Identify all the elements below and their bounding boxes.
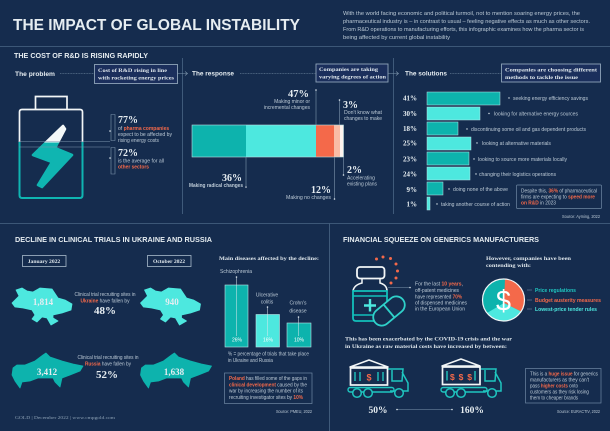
chart: solutions bars: 30%: [403, 110, 417, 118]
chart: solutions bars: [403, 92, 588, 210]
callout: huge issue: manufacturers as they can't: [530, 378, 590, 384]
legend: pressures: Price regulations: [535, 288, 576, 294]
icon: battery with lightning bolt: [20, 96, 82, 198]
source: Euractiv: Source: EURACTIV, 2022: [557, 409, 601, 414]
chart: response stacked bar: 36%: [222, 173, 242, 184]
icon: medicine bottle and pill: [353, 256, 408, 329]
stat: 77% and 72%: other sectors: [118, 164, 149, 170]
stat: Ukraine 48%: Ukraine have fallen by: [80, 298, 130, 304]
chart: pressure pie with dollar sign: $: [496, 286, 511, 318]
callout: Poland: clinical development caused by the: [229, 382, 307, 388]
chart: main diseases: % = percentage of trials that take place: [228, 352, 309, 358]
text: contending with: [486, 256, 572, 269]
callout: huge issue: pass higher costs onto: [530, 384, 578, 390]
map: Russia January: [12, 353, 83, 388]
panel: cost of R&D: [14, 53, 602, 219]
flow header row: Companies are taking: [319, 67, 378, 73]
stat: Ukraine 48%: 48%: [94, 305, 116, 317]
chart: main diseases: 10%: [294, 338, 305, 344]
text: off-patent medicines: [388, 282, 467, 312]
chart: response stacked bar: incremental changes: [264, 105, 310, 111]
chart: main diseases: Schizophrenia: [220, 269, 252, 275]
map: Ukraine January: 1,814: [33, 297, 54, 307]
stat: 77% and 72%: [19, 114, 172, 174]
stat: Russia 52%: [78, 355, 139, 381]
text: off-patent medicines: off-patent medicines: [415, 288, 459, 294]
panel: clinical trials: [12, 237, 319, 420]
map: Russia October: 1,638: [164, 367, 185, 377]
footer: GOLD | December 2022 | www.cmpgold.com: [15, 415, 115, 420]
chart: main diseases: in Ukraine and Russia: [228, 358, 273, 364]
chart: solutions bars: 25%: [403, 140, 417, 148]
heading: cost of R&D: THE COST OF R&D IS RISING RAPIDLY: [14, 53, 148, 60]
title: THE IMPACT OF GLOBAL INSTABILITY: [13, 17, 300, 34]
legend: pressures: Budget austerity measures: [535, 298, 601, 304]
text: contending with: contending with:: [486, 263, 531, 269]
text: off-patent medicines: of dispensed medicines: [415, 300, 467, 306]
date labels: January 2022: [28, 259, 60, 265]
chart: main diseases: 26%: [232, 338, 243, 344]
intro text: With the world facing economic and political turmoil, not to mention soaring energy prices, the: [343, 11, 580, 17]
map: Ukraine October: 940: [165, 297, 179, 307]
flow header row: Cost of R&D rising in line: [98, 68, 168, 74]
callout: huge issue: [526, 368, 601, 403]
text: off-patent medicines: in the European Union: [415, 306, 465, 312]
flow header row: The solutions: [405, 70, 447, 78]
chart: response stacked bar: Making minor or: [274, 99, 310, 105]
icon: truck 50%: [348, 360, 408, 397]
chart: solutions bars: doing none of the above: [453, 187, 508, 193]
flow header row: Companies are choosing different: [505, 68, 597, 74]
chart: solutions bars: 1%: [406, 200, 417, 208]
chart: response stacked bar: existing plans: [347, 182, 377, 188]
map: Russia January: 3,412: [37, 367, 58, 377]
icon: truck 50%: $: [366, 372, 372, 382]
callout: speed more on R&D: [516, 185, 602, 208]
source: PMEU: Source: PMEU, 2022: [276, 409, 313, 414]
legend: pressures: Lowest-price tender rules: [535, 307, 597, 313]
map: Russia October: [140, 353, 212, 388]
icon: truck 160%: $$$: [450, 372, 472, 382]
chart: main diseases: colitis: [261, 300, 274, 306]
stat: 77% and 72%: 72%: [118, 148, 138, 159]
range: 50% to 160%: [368, 406, 484, 416]
chart: main diseases: disease: [289, 308, 307, 314]
callout: huge issue: This is a huge issue for generics: [530, 372, 598, 378]
legend: pressures: [527, 288, 601, 313]
date labels: [22, 256, 191, 266]
stat: 77% and 72%: rising energy costs: [118, 138, 159, 144]
chart: solutions bars: discontinuing some oil and gas dependent products: [471, 127, 587, 133]
intro text: [343, 11, 590, 41]
stat: Ukraine 48%: [74, 292, 136, 317]
callout: speed more on R&D: on R&D in 2023: [521, 200, 556, 206]
range: 50% to 160%: 160%: [460, 406, 484, 416]
range: 50% to 160%: 50%: [368, 406, 388, 416]
chart: solutions bars: 24%: [403, 170, 417, 178]
text: raw material costs: This has been exacerbated by the COVID-19 crisis and the war: [345, 336, 513, 342]
text: off-patent medicines: For the last 10 years,: [415, 282, 463, 288]
chart: solutions bars: 23%: [403, 156, 417, 164]
text: contending with: However, companies have been: [486, 256, 572, 262]
intro text: being affected by current global instability: [343, 35, 450, 41]
stat: 77% and 72%: expect to be affected by: [118, 132, 172, 138]
stat: Russia 52%: Russia have fallen by: [85, 362, 131, 368]
chart: main diseases: [219, 256, 319, 364]
callout: Poland: war by increasing the number of its: [229, 388, 303, 394]
chart: main diseases: Crohn's: [289, 300, 307, 306]
callout: speed more on R&D: Despite this, 36% of pharmaceutical: [521, 188, 597, 194]
chart: response stacked bar: 2%: [347, 165, 362, 176]
chart: response stacked bar: changes to make: [344, 116, 382, 122]
chart: solutions bars: seeking energy efficiency savings: [513, 96, 588, 102]
callout: huge issue: them to cheaper brands: [530, 396, 578, 402]
chart: main diseases: 16%: [263, 338, 274, 344]
flow header row: The response: [192, 70, 234, 78]
heading: clinical trials: DECLINE IN CLINICAL TRIALS IN UKRAINE AND RUSSIA: [15, 237, 212, 244]
chart: pressure pie with dollar sign: [482, 279, 524, 321]
flow header row: [15, 64, 600, 84]
chart: response stacked bar: Making no changes: [286, 195, 332, 201]
heading: generics squeeze: FINANCIAL SQUEEZE ON GENERICS MANUFACTURERS: [343, 237, 539, 244]
callout: Poland: Poland has filled some of the gaps in: [229, 376, 307, 382]
date labels: October 2022: [153, 259, 185, 265]
chart: solutions bars: changing their logistics operations: [479, 172, 557, 178]
chart: solutions bars: 18%: [403, 125, 417, 133]
chart: response stacked bar: [189, 89, 383, 201]
chart: solutions bars: taking another course of action: [441, 202, 510, 208]
text: raw material costs: [345, 336, 513, 350]
stat: Ukraine 48%: Clinical trial recruiting sites in: [74, 292, 136, 298]
flow header row: methods to tackle the issue: [505, 75, 579, 81]
map: Ukraine October: [140, 288, 200, 325]
stat: Russia 52%: 52%: [96, 369, 118, 381]
text: off-patent medicines: have represented 70%: [415, 294, 463, 300]
callout: Poland: [224, 373, 312, 404]
chart: solutions bars: 9%: [406, 186, 417, 194]
map: Ukraine January: [12, 288, 72, 325]
chart: solutions bars: looking for alternative energy sources: [494, 112, 578, 118]
chart: response stacked bar: 3%: [343, 100, 358, 111]
source: Ayming: Source: Ayming, 2022: [562, 214, 601, 219]
callout: huge issue: customers as they risk losing: [530, 390, 589, 396]
callout: speed more on R&D: firms are expecting to speed more: [521, 194, 595, 200]
flow header row: The problem: [15, 71, 55, 78]
chart: response stacked bar: 47%: [288, 89, 309, 100]
intro text: From R&D operations to manufacturing efforts, this infographic examines how the pharma sector is: [343, 27, 584, 33]
chart: response stacked bar: Making radical changes: [189, 183, 243, 189]
text: raw material costs: in Ukraine as raw material costs have increased by between:: [345, 344, 507, 350]
callout: Poland: recruiting investigator sites by 10%: [229, 395, 304, 401]
flow header row: varying degrees of action: [319, 74, 387, 80]
chart: main diseases: Main diseases affected by the decline:: [219, 256, 319, 262]
chart: solutions bars: looking at alternative materials: [482, 141, 551, 147]
icon: truck 160%: [441, 359, 501, 397]
chart: main diseases: Ulcerative: [256, 292, 278, 298]
stat: 77% and 72%: 77%: [118, 115, 138, 126]
flow header row: with rocketing energy prices: [98, 76, 175, 82]
panel: generics squeeze: [343, 237, 601, 416]
stat: Russia 52%: Clinical trial recruiting sites in: [78, 355, 139, 361]
chart: response stacked bar: 12%: [311, 185, 331, 196]
chart: response stacked bar: Accelerating: [347, 176, 375, 182]
stat: 77% and 72%: of pharma companies: [118, 126, 169, 132]
chart: solutions bars: 41%: [403, 94, 417, 102]
chart: response stacked bar: Don't know what: [344, 110, 383, 116]
chart: solutions bars: looking to source more materials locally: [478, 157, 567, 163]
intro text: pharmaceutical industry is – in contrast to usual – feeling negative effects as much as other sectors.: [343, 19, 590, 25]
stat: 77% and 72%: is the average for all: [118, 158, 164, 164]
